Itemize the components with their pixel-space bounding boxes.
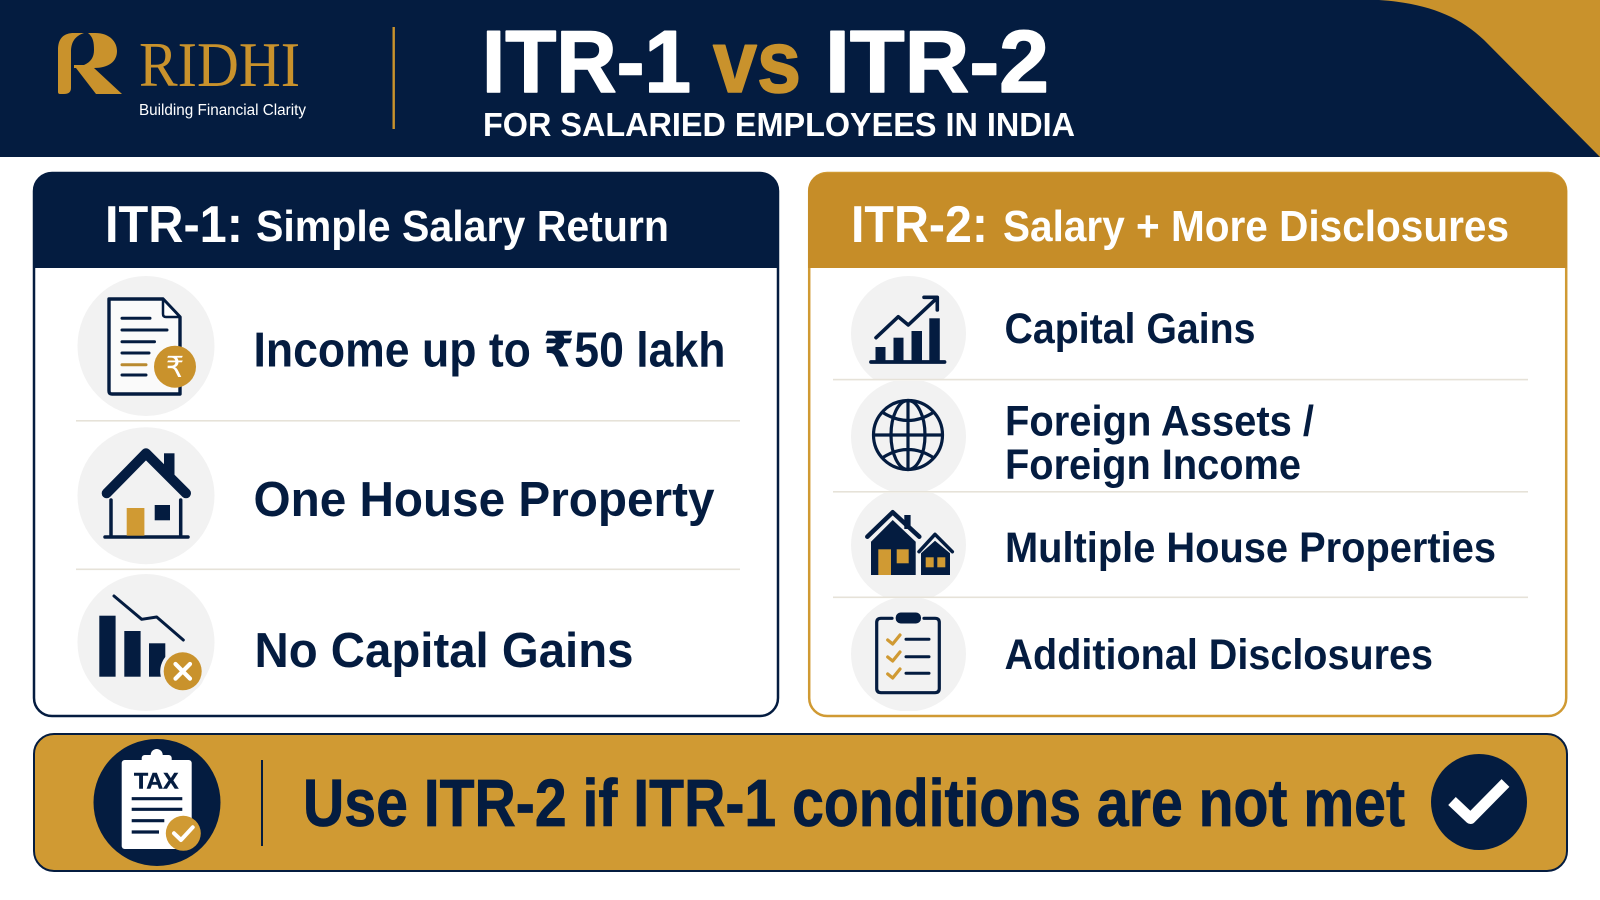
callout text: Use ITR-2 if ITR-1 conditions are not met [303, 766, 1405, 841]
logo mark [58, 33, 122, 94]
row: foreign assets and income [1005, 398, 1314, 489]
icon: house [78, 427, 214, 564]
title: ITR-2 [825, 12, 1049, 111]
callout bar [34, 734, 1567, 871]
row: no capital gains: No Capital Gains [254, 624, 634, 678]
title [482, 12, 1049, 111]
icon: check badge [1431, 754, 1527, 850]
subtitle: FOR SALARIED EMPLOYEES IN INDIA [483, 106, 1075, 143]
icon: rising chart [851, 276, 966, 378]
title: vs [713, 12, 801, 111]
icon: document with rupee: ₹ [166, 352, 184, 384]
ITR-1 heading [105, 196, 669, 254]
ITR-1 heading: Simple Salary Return [256, 202, 669, 251]
icon: globe [851, 379, 966, 494]
row: additional disclosures: Additional Disclosures [1004, 631, 1433, 679]
title: ITR-1 [482, 12, 691, 111]
brand name: RIDHI [139, 29, 300, 100]
row: income limit: Income up to ₹50 lakh [254, 324, 726, 378]
ITR-2 heading [851, 196, 1509, 254]
panel: ITR-2 [808, 173, 1567, 716]
row: one house property: One House Property [254, 473, 714, 527]
row: capital gains: Capital Gains [1004, 305, 1256, 353]
icon: checklist clipboard [851, 596, 966, 712]
header banner [0, 0, 1600, 157]
ITR-1 heading: ITR-1: [105, 196, 243, 254]
ITR-2 heading: Salary + More Disclosures [1003, 202, 1509, 251]
row: foreign assets and income: Foreign Income [1005, 441, 1301, 489]
row: multiple house properties: Multiple House Properties [1005, 524, 1496, 572]
ITR-2 heading: ITR-2: [851, 196, 988, 254]
icon: tax clipboard [94, 739, 220, 866]
icon: tax clipboard: TAX [134, 768, 179, 793]
logo [58, 29, 306, 119]
icon: two houses [851, 488, 966, 602]
gold corner accent [1379, 0, 1600, 157]
panel: ITR-1 [33, 173, 779, 716]
icon: falling bars with cross [78, 574, 214, 711]
row: foreign assets and income: Foreign Assets / [1005, 398, 1314, 446]
icon: document with rupee [78, 276, 214, 416]
tagline: Building Financial Clarity [139, 102, 306, 119]
